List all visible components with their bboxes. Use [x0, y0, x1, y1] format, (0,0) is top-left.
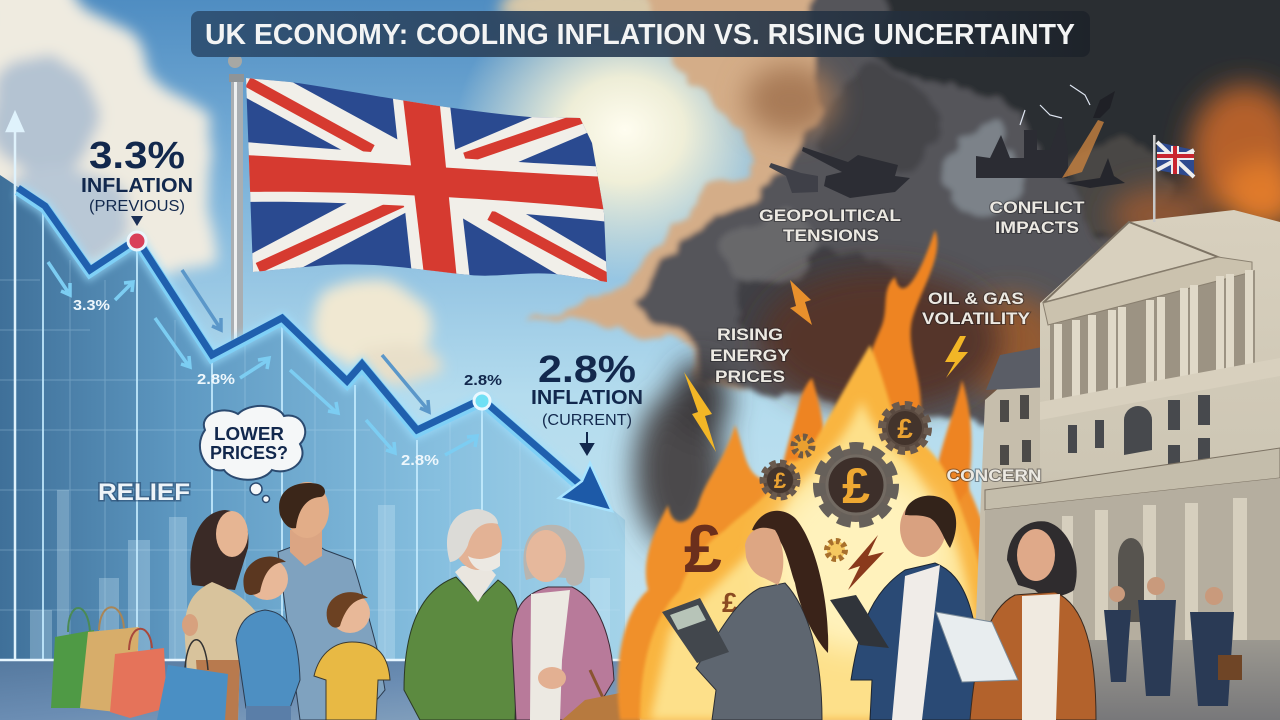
label: concern: CONCERN	[946, 466, 1042, 485]
upper windows and arch	[1068, 395, 1210, 465]
jacket	[851, 563, 984, 720]
flagpole	[228, 54, 244, 342]
flame body	[618, 425, 1005, 720]
cornice	[1040, 358, 1280, 420]
chart value labels: 3.3%	[73, 297, 110, 314]
icon: small flag on building	[1153, 135, 1194, 222]
chart floor	[0, 660, 640, 720]
stat: 2.8% inflation current: INFLATION	[531, 387, 643, 409]
flame inner yellow	[650, 400, 975, 720]
label: rising energy prices: RISING	[717, 325, 783, 344]
entablature	[1043, 257, 1252, 325]
ground	[1085, 640, 1280, 720]
chart value labels: 2.8%	[197, 371, 235, 388]
chart value labels: 2.8%	[464, 372, 502, 389]
chart line: inflation falling	[18, 188, 590, 495]
icon: pound symbols	[684, 511, 738, 618]
calculator	[830, 595, 889, 648]
label: oil and gas volatility: VOLATILITY	[922, 309, 1031, 328]
flame tongue: left	[770, 378, 830, 540]
darker trend arrows over sky	[182, 270, 429, 412]
father	[278, 482, 385, 720]
balustrade	[985, 448, 1280, 510]
boy in blue	[236, 557, 300, 720]
label: conflict impacts: CONFLICT	[990, 198, 1085, 217]
older woman	[512, 525, 614, 720]
bag: coral	[110, 629, 167, 718]
label: oil and gas volatility: OIL & GAS	[928, 289, 1024, 308]
label: geopolitical tensions: GEOPOLITICAL	[759, 206, 901, 225]
chart axis arrow	[7, 113, 23, 660]
fire	[618, 230, 1005, 720]
icon: skyline and rocket	[976, 85, 1125, 188]
icon: large pound gear: £	[842, 458, 870, 514]
flame inner amber	[640, 345, 990, 720]
sun glow	[455, 0, 795, 280]
label: relief: RELIEF	[98, 479, 190, 506]
shopping bag: blue in front	[157, 640, 228, 720]
flame tongue: main	[835, 230, 937, 520]
icon: pound symbols: £	[722, 587, 738, 618]
title: UK ECONOMY: COOLING INFLATION VS. RISING UNCERTAINTY	[205, 19, 1075, 51]
callout: lower prices thought bubble: PRICES?	[210, 443, 288, 463]
title	[191, 11, 1090, 57]
flame tongue: right	[929, 380, 971, 540]
banker one	[1104, 586, 1131, 682]
face	[745, 528, 783, 585]
icon: small gear lower centre	[827, 541, 845, 559]
label: rising energy prices	[710, 325, 791, 386]
portico interior	[1050, 270, 1255, 405]
clouds: bright clouds	[0, 0, 700, 387]
bag: green	[51, 608, 96, 708]
people: concerned woman with report	[936, 521, 1096, 720]
orange sky at right	[745, 65, 1280, 395]
smoke behind the fire	[634, 270, 1000, 550]
label: conflict impacts: IMPACTS	[995, 218, 1079, 237]
label: rising energy prices: PRICES	[715, 367, 785, 386]
icon: large pound gear	[819, 448, 893, 522]
people: worried woman with calculator	[662, 511, 828, 720]
shirt	[1022, 594, 1060, 720]
hair	[752, 511, 828, 653]
people: older couple	[404, 509, 640, 720]
chart grid and bars	[0, 205, 640, 660]
left wing	[975, 345, 1060, 640]
icon: small pound gear top: £	[897, 413, 913, 444]
labels: risk labels	[710, 198, 1085, 485]
cardigan	[970, 592, 1096, 720]
label: geopolitical tensions: TENSIONS	[783, 226, 879, 245]
icon: lightning bolts	[684, 280, 968, 590]
stat: 3.3% inflation previous	[81, 135, 193, 215]
flame white hot centre	[770, 470, 950, 650]
lower columns	[1062, 498, 1247, 646]
icon: small gear top centre	[794, 437, 812, 455]
columns	[1058, 270, 1249, 402]
pediment	[1043, 222, 1218, 303]
bag: tan	[80, 607, 139, 713]
banker two	[1138, 577, 1176, 696]
boy in yellow	[314, 592, 390, 720]
head	[900, 499, 946, 557]
icon: small pound gear top	[882, 405, 928, 451]
report	[936, 612, 1018, 682]
lower level	[985, 478, 1280, 645]
icon: UK flag	[246, 78, 607, 282]
banker three	[1190, 587, 1234, 706]
label: rising energy prices: ENERGY	[710, 346, 791, 365]
people: worried man with tablet	[830, 496, 984, 720]
arches	[1118, 538, 1144, 622]
stat: 2.8% inflation current	[531, 349, 643, 454]
chart area below the line	[0, 175, 625, 660]
jacket	[696, 583, 822, 720]
bank of england building	[975, 210, 1280, 646]
marker: current point	[474, 393, 490, 409]
hair	[1007, 521, 1077, 596]
face	[1017, 529, 1055, 581]
label: oil and gas volatility	[922, 289, 1031, 328]
icon: tanks	[769, 147, 910, 198]
calculator	[662, 598, 729, 663]
small trend arrows	[48, 262, 477, 455]
people: bankers in background	[1104, 577, 1242, 706]
handbag	[562, 670, 640, 720]
main block	[1040, 210, 1280, 640]
callout: lower prices thought bubble: LOWER	[214, 424, 284, 444]
shopping bags	[51, 607, 167, 718]
label: geopolitical tensions	[759, 206, 901, 245]
stat: 2.8% inflation current: 2.8%	[538, 349, 636, 391]
icon: pound symbols: £	[684, 511, 722, 587]
shirt	[892, 565, 940, 720]
chart value labels: 2.8%	[401, 452, 439, 469]
older man	[404, 509, 518, 720]
callout: lower prices thought bubble	[200, 406, 305, 502]
stat: 2.8% inflation current: (CURRENT)	[542, 412, 632, 429]
storm clouds	[530, 0, 1280, 420]
icon: small pound gear left: £	[774, 468, 787, 493]
people: family	[182, 482, 390, 720]
chart line arrowhead	[559, 463, 612, 511]
stat: 3.3% inflation previous: 3.3%	[89, 135, 185, 177]
stat: 3.3% inflation previous: (PREVIOUS)	[89, 198, 185, 215]
briefcase	[1218, 655, 1242, 680]
mother	[182, 510, 258, 720]
stat: 3.3% inflation previous: INFLATION	[81, 175, 193, 197]
label: conflict impacts	[990, 198, 1085, 237]
marker: previous point	[128, 216, 146, 250]
icon: small pound gear left	[763, 463, 797, 497]
chart value labels	[73, 297, 502, 469]
